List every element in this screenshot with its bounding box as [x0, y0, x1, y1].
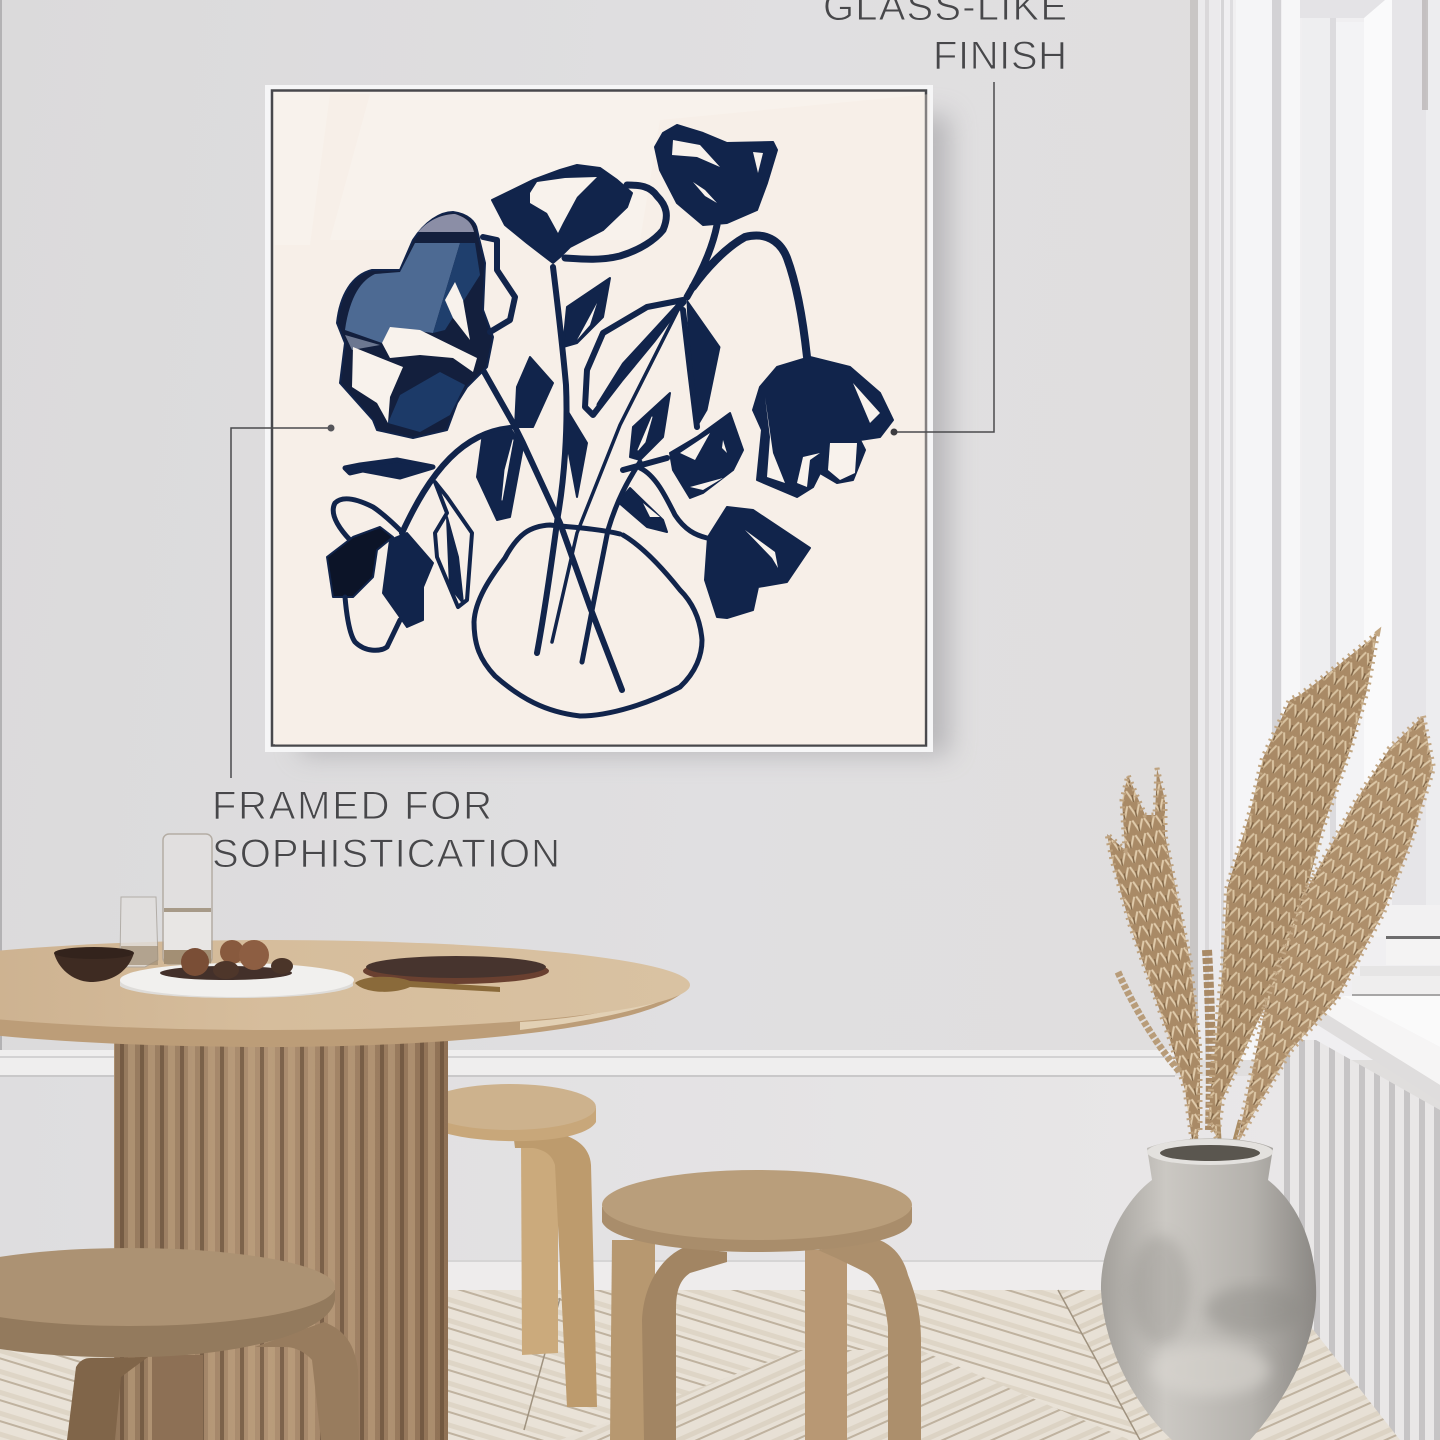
callout: framed for sophistication: SOPHISTICATION — [212, 832, 560, 876]
large left flower — [337, 212, 515, 438]
vase outline — [474, 525, 702, 716]
lower right flower — [705, 507, 810, 618]
window frame and sill — [1190, 0, 1440, 1440]
glass reflection — [275, 94, 930, 745]
drinking glass — [120, 897, 158, 967]
white frame — [265, 85, 933, 752]
floor — [0, 1290, 1440, 1440]
callout: framed for sophistication: FRAMED FOR — [212, 784, 492, 828]
lower left flower — [327, 499, 433, 650]
leaves — [345, 278, 720, 607]
right drooping flower — [753, 357, 893, 497]
stacked books — [1352, 936, 1440, 996]
lower side feather — [1118, 972, 1180, 1072]
callout: framed for sophistication — [212, 424, 560, 876]
ceramic floor vase — [1101, 1138, 1316, 1440]
pampas grass — [1107, 634, 1433, 1150]
top right flower — [655, 125, 777, 225]
wooden plate — [363, 956, 549, 984]
front left stool — [0, 1248, 359, 1440]
left plume — [1107, 768, 1200, 1140]
stalks — [1193, 1100, 1240, 1150]
table top — [0, 940, 690, 1047]
tall centre plume — [1208, 634, 1377, 1138]
front centre stool — [602, 1170, 921, 1440]
right plume — [1237, 716, 1433, 1145]
top centre flower — [492, 165, 666, 263]
stems — [402, 225, 807, 690]
marble board with nuts — [120, 940, 354, 998]
framed artwork — [265, 85, 933, 752]
callout: glass-like finish — [823, 0, 1067, 436]
small upper bud — [670, 413, 743, 498]
dining table — [0, 834, 690, 1440]
botanical painting — [327, 125, 893, 716]
callout: glass-like finish: FINISH — [933, 34, 1067, 78]
radiator — [1280, 1040, 1440, 1440]
dark inner line and canvas — [272, 90, 926, 746]
fluted pedestal — [114, 1030, 448, 1440]
dark bowl — [54, 947, 134, 982]
frame shadow — [300, 115, 950, 755]
thin centre plume — [1207, 950, 1211, 1130]
carafe — [163, 834, 212, 964]
window sill — [1316, 996, 1440, 1102]
spoon — [355, 977, 500, 992]
back stool — [424, 1084, 597, 1407]
